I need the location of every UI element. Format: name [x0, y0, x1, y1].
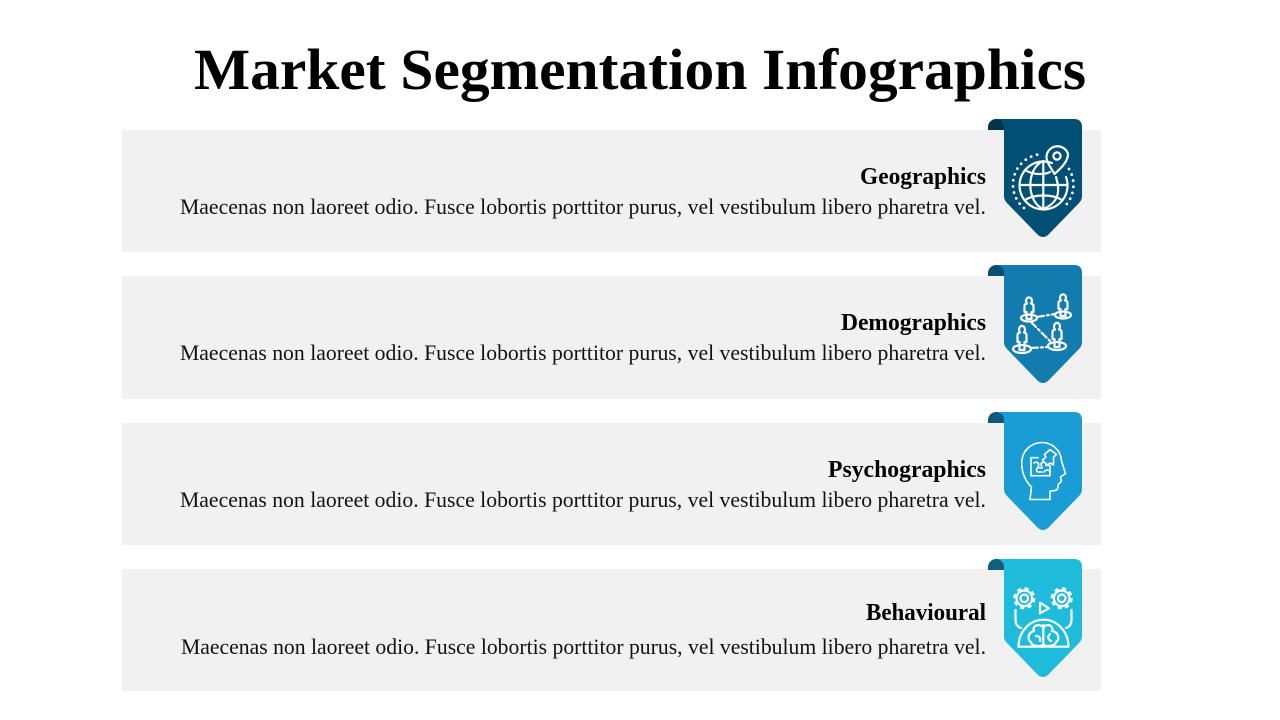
- ribbon tab: [988, 265, 1004, 276]
- ribbon: [996, 265, 1082, 383]
- panel: behavioural: [122, 559, 1101, 691]
- icon: gears, play and brain dome: [1015, 588, 1072, 647]
- ribbon: [996, 412, 1082, 530]
- panel background: [122, 276, 1101, 399]
- panel background: [122, 569, 1101, 691]
- panel background: [122, 423, 1101, 545]
- ribbon: [996, 119, 1082, 237]
- heading: Geographics: [860, 164, 986, 190]
- heading: Demographics: [841, 310, 986, 336]
- icon: connected people: [1013, 294, 1071, 353]
- ribbon tab: [988, 412, 1004, 423]
- description: Maecenas non laoreet odio. Fusce lobortis porttitor purus, vel vestibulum libero pharetra vel.: [180, 487, 986, 512]
- title: Market Segmentation Infographics: [194, 37, 1086, 102]
- heading: Behavioural: [866, 600, 986, 626]
- panel background: [122, 130, 1101, 252]
- panel: psychographics: [122, 412, 1101, 545]
- heading: Psychographics: [828, 457, 986, 483]
- panel: demographics: [122, 265, 1101, 399]
- ribbon tab: [988, 559, 1004, 570]
- description: Maecenas non laoreet odio. Fusce lobortis porttitor purus, vel vestibulum libero pharetra vel.: [180, 340, 986, 365]
- ribbon tab: [988, 119, 1004, 130]
- description: Maecenas non laoreet odio. Fusce lobortis porttitor purus, vel vestibulum libero pharetra vel.: [180, 194, 986, 219]
- icon: head with puzzle: [1022, 442, 1066, 500]
- description: Maecenas non laoreet odio. Fusce lobortis porttitor purus, vel vestibulum libero pharetra vel.: [181, 634, 986, 659]
- icon: globe with location pin: [1013, 146, 1073, 209]
- panel: geographics: [122, 119, 1101, 252]
- ribbon: [996, 559, 1082, 677]
